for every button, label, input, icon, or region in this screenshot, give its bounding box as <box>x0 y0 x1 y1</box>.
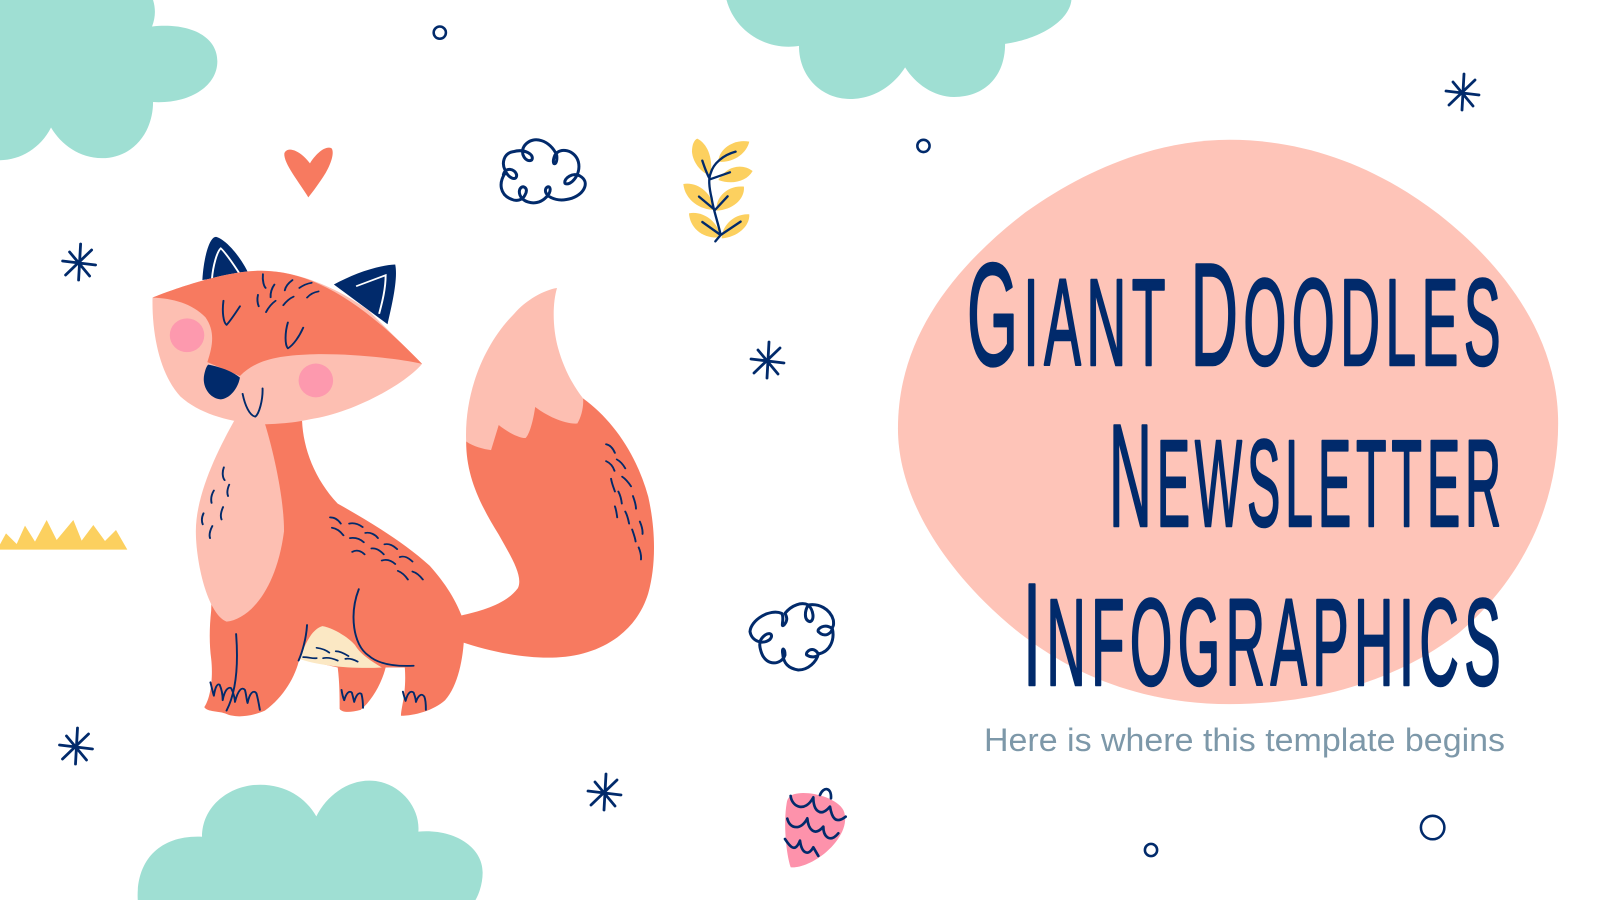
fox body <box>204 421 464 716</box>
fox chest <box>196 421 284 622</box>
icon: heart <box>284 148 333 197</box>
doodle cloud: top <box>501 140 585 203</box>
fox head <box>152 271 422 424</box>
fox ears <box>202 237 396 324</box>
fox tail <box>460 288 654 658</box>
title <box>967 233 1506 716</box>
star doodles <box>60 74 1479 810</box>
doodle cloud: lower <box>750 604 834 670</box>
blob: title background <box>898 140 1558 704</box>
fox belly <box>299 626 382 668</box>
fox illustration <box>152 237 654 716</box>
yellow zigzag grass <box>0 520 127 550</box>
fox line details <box>202 274 643 711</box>
subtitle: Here is where this template begins <box>984 722 1505 758</box>
icon: yellow leaf sprig <box>683 139 753 241</box>
icon: pink strawberry <box>785 789 846 867</box>
cloud: top centre <box>727 0 1071 99</box>
small circles <box>434 27 1444 856</box>
cloud: top left <box>0 0 217 160</box>
cloud: bottom <box>138 781 483 900</box>
